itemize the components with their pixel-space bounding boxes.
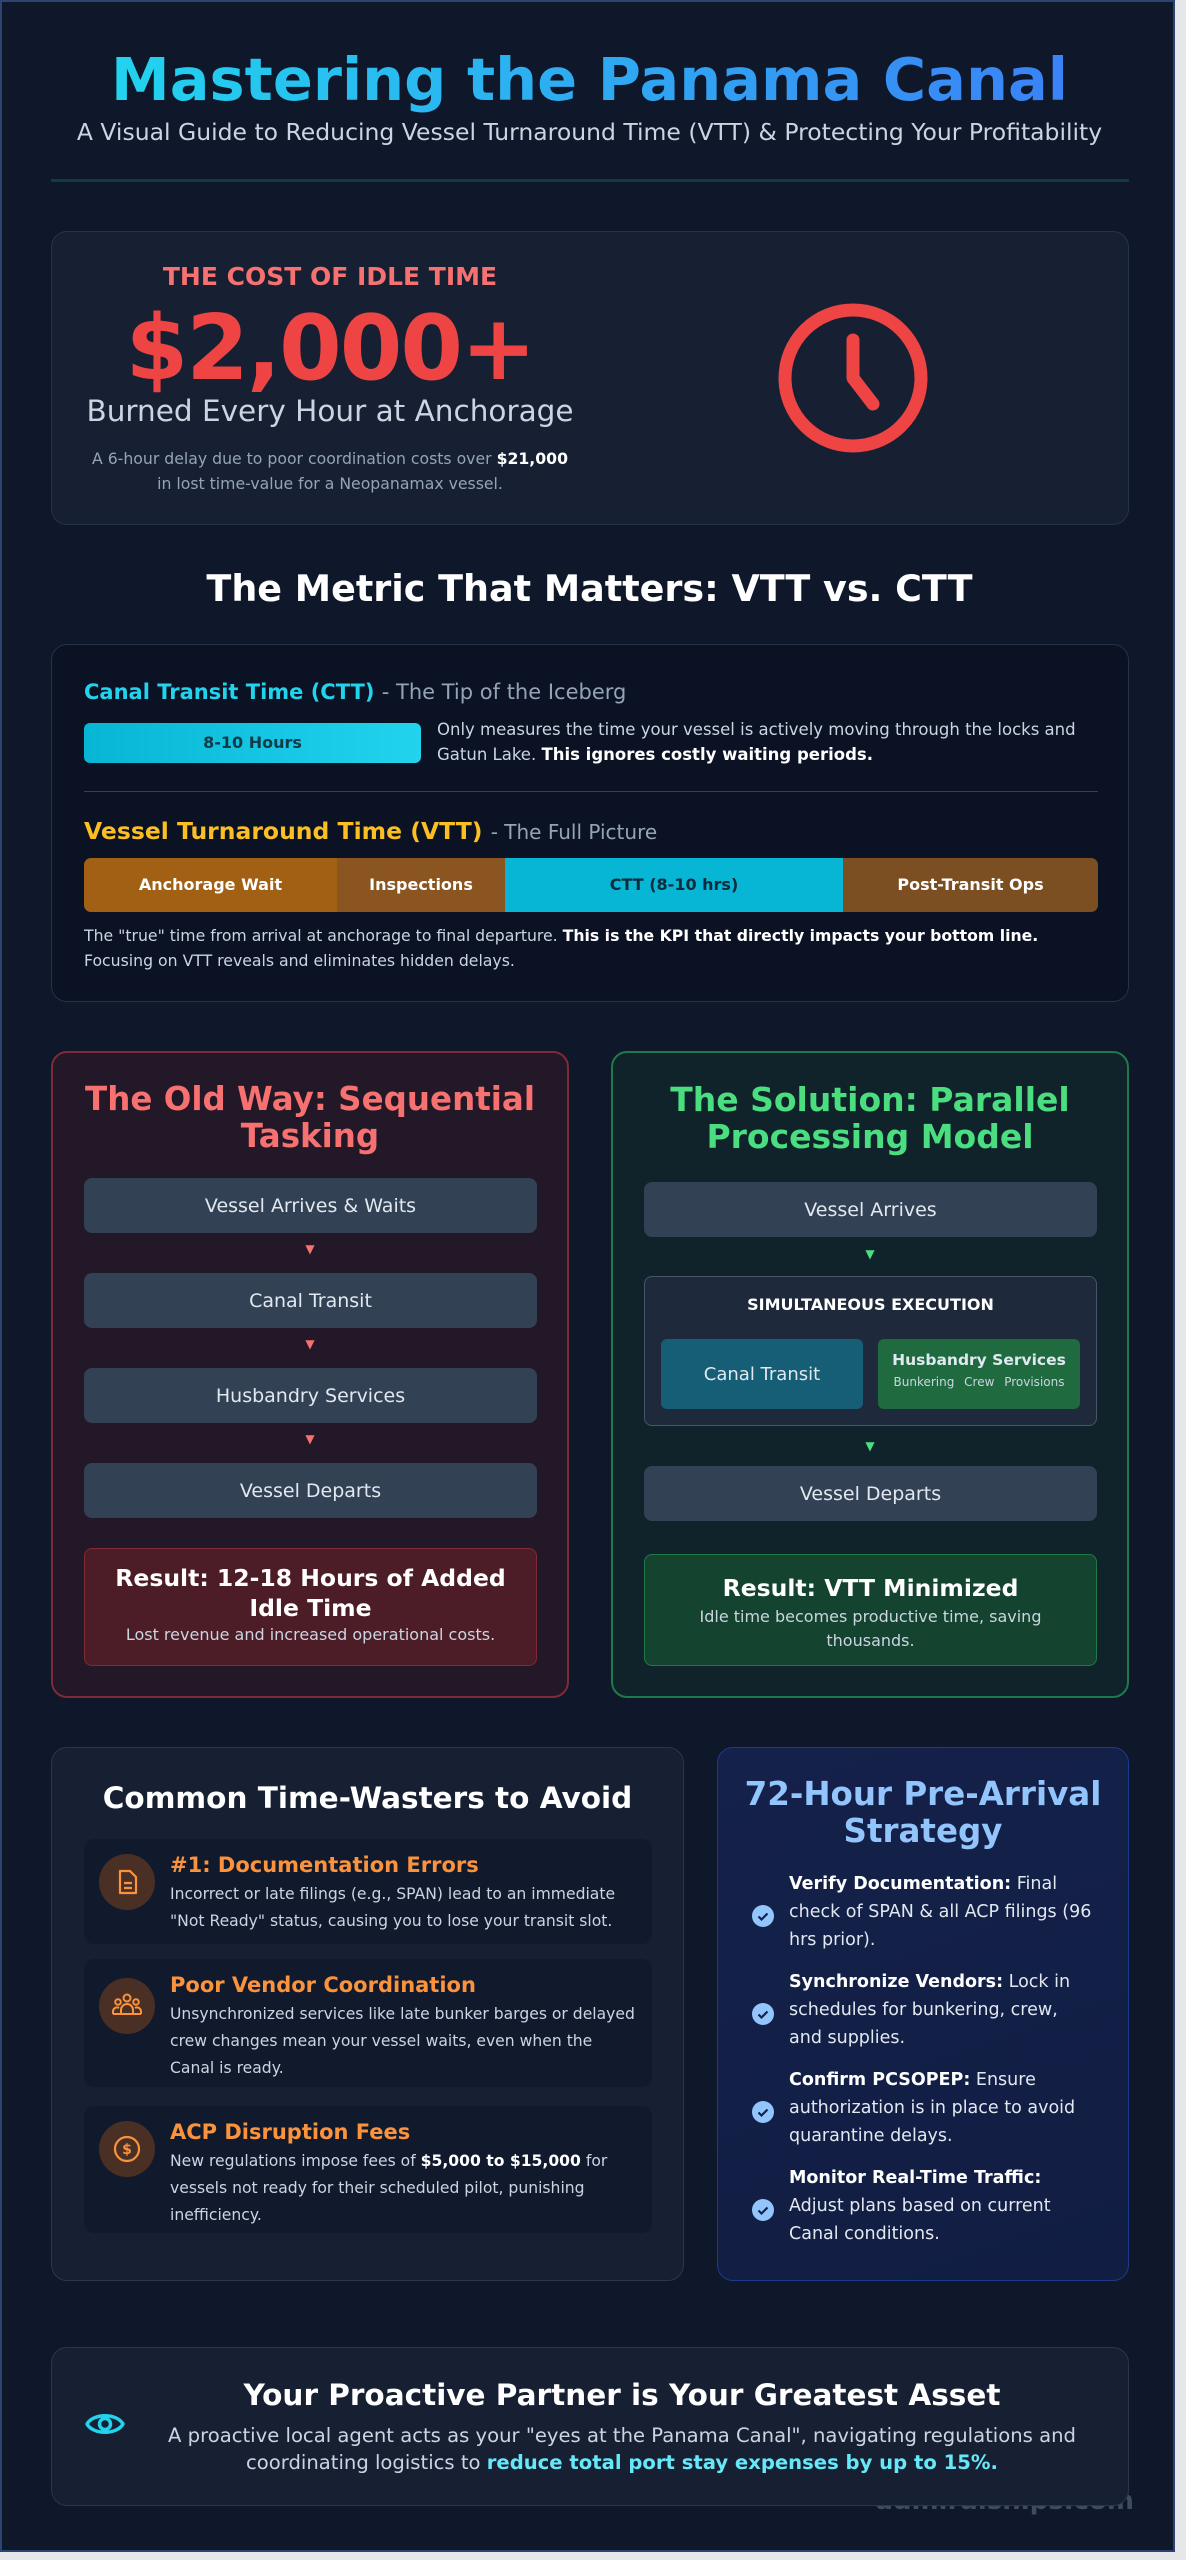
step: [84, 1178, 537, 1233]
check item: Confirm PCSOPEP: Ensure authorization is in place to avoid quarantine delays.: [789, 2070, 1075, 2146]
strategy title: [745, 1775, 1101, 1850]
canal transit: Canal Transit: [704, 1364, 820, 1384]
watermark: admiralships.com: [875, 2486, 1134, 2516]
result box: Idle time becomes productive time, saving: [700, 1607, 1041, 1626]
panel: metric: [51, 644, 1129, 1002]
footer text: [168, 2424, 1076, 2474]
CTT heading: Canal Transit Time (CTT) - The Tip of the Iceberg: [84, 680, 626, 704]
panel: footer partner: [51, 2347, 1129, 2506]
step: [84, 1273, 537, 1328]
old way title: [85, 1080, 535, 1155]
step: [84, 1463, 537, 1518]
husbandry: Bunkering Crew Provisions: [894, 1375, 1064, 1389]
CTT description: Only measures the time your vessel is actively moving through the locks and Gatun Lake. This ignores costly waiting periods.: [437, 720, 1076, 764]
VTT bar: Anchorage Wait: [139, 875, 282, 894]
step: Husbandry Services: [216, 1384, 405, 1406]
item: documentation errors: Incorrect or late filings (e.g., SPAN) lead to an immediate "Not Ready" status, causing you to lose your transit slot.: [170, 1885, 615, 1930]
simultaneous box: [644, 1276, 1097, 1426]
result box: Result: 12-18 Hours of Added: [115, 1564, 506, 1592]
time-wasters title: Common Time-Wasters to Avoid: [103, 1781, 632, 1815]
panel: 72-hour strategy: [717, 1747, 1129, 2281]
footer text: A proactive local agent acts as your "eyes at the Panama Canal", navigating regulations and: [168, 2424, 1076, 2447]
solution title: Processing Model: [706, 1117, 1034, 1156]
VTT description: Focusing on VTT reveals and eliminates hidden delays.: [84, 951, 515, 970]
item: vendor coordination: Poor Vendor Coordination: [170, 1973, 476, 1997]
item: documentation errors: #1: Documentation Errors: [170, 1853, 479, 1877]
cost note: in lost time-value for a Neopanamax vessel.: [157, 474, 503, 493]
check item: Verify Documentation: Final check of SPAN & all ACP filings (96 hrs prior).: [789, 1874, 1091, 1950]
subtitle: A Visual Guide to Reducing Vessel Turnaround Time (VTT) & Protecting Your Profitability: [77, 118, 1102, 146]
cost note: [92, 449, 568, 493]
big number: $2,000+: [126, 296, 534, 401]
step: Vessel Departs: [240, 1480, 381, 1502]
husbandry: Husbandry Services: [892, 1351, 1066, 1369]
heading: metric: The Metric That Matters: VTT vs. CTT: [206, 567, 973, 610]
cost note: A 6-hour delay due to poor coordination costs over $21,000: [92, 449, 568, 468]
simultaneous box: SIMULTANEOUS EXECUTION: [747, 1295, 994, 1314]
arrow: ▼: [305, 1242, 315, 1256]
icon: dollar: $: [122, 2142, 132, 2158]
VTT bar: [84, 858, 1098, 912]
husbandry: [878, 1339, 1080, 1409]
panel: cost of idle time: [51, 231, 1129, 525]
VTT bar: Post-Transit Ops: [897, 875, 1044, 894]
arrow: ▼: [305, 1432, 315, 1446]
item: vendor coordination: crew changes mean your vessel waits, even when the: [170, 2032, 592, 2050]
VTT bar: Inspections: [369, 875, 473, 894]
item: vendor coordination: [84, 1959, 652, 2087]
panel: solution: [611, 1051, 1129, 1698]
old way title: Tasking: [241, 1117, 379, 1155]
item: ACP fees: [84, 2106, 652, 2233]
result box: [84, 1548, 537, 1666]
item: ACP fees: New regulations impose fees of $5,000 to $15,000 for vessels not ready for their scheduled pilot, punishing inefficiency.: [170, 2152, 607, 2224]
step: Vessel Arrives & Waits: [205, 1194, 416, 1216]
result box: thousands.: [826, 1631, 915, 1650]
item: vendor coordination: Canal is ready.: [170, 2059, 284, 2077]
solution title: The Solution: Parallel: [670, 1080, 1070, 1119]
step: Vessel Departs: [800, 1482, 941, 1504]
step: Vessel Arrives: [804, 1198, 937, 1220]
footer text: coordinating logistics to reduce total port stay expenses by up to 15%.: [246, 2451, 998, 2474]
result box: [644, 1554, 1097, 1666]
icon: dollar: [99, 2121, 155, 2177]
panel: old way: [51, 1051, 569, 1698]
old way title: The Old Way: Sequential: [85, 1080, 535, 1118]
check item: Monitor Real-Time Traffic: Adjust plans based on current Canal conditions.: [789, 2168, 1051, 2244]
footer title: Your Proactive Partner is Your Greatest Asset: [244, 2378, 1000, 2412]
step: [644, 1182, 1097, 1237]
icon: people: [99, 1978, 155, 2034]
strategy title: Strategy: [844, 1812, 1002, 1850]
VTT description: [84, 926, 1038, 970]
step: Canal Transit: [249, 1290, 372, 1312]
icon: document: [99, 1854, 155, 1910]
step: [84, 1368, 537, 1423]
cost subtitle: Burned Every Hour at Anchorage: [86, 394, 574, 428]
strategy title: 72-Hour Pre-Arrival: [745, 1775, 1101, 1813]
cost heading: THE COST OF IDLE TIME: [163, 262, 497, 291]
arrow: ▼: [865, 1247, 875, 1261]
panel: time-wasters: [51, 1747, 684, 2281]
CTT bar: 8-10 Hours: [203, 733, 302, 752]
arrow: ▼: [865, 1439, 875, 1453]
canal transit: [661, 1339, 863, 1409]
icon: clock: [778, 304, 928, 452]
result box: Idle Time: [249, 1594, 372, 1622]
item: documentation errors: [84, 1839, 652, 1944]
VTT description: The "true" time from arrival at anchorage to final departure. This is the KPI that directly impacts your bottom line.: [84, 926, 1038, 945]
result box: Lost revenue and increased operational costs.: [126, 1625, 495, 1644]
step: [644, 1466, 1097, 1521]
item: vendor coordination: Unsynchronized services like late bunker barges or delayed: [170, 2005, 635, 2023]
checklist: [752, 1874, 1091, 2244]
CTT bar: [84, 723, 421, 763]
title: Mastering the Panama Canal: [111, 45, 1068, 114]
icon: eye: [85, 2414, 125, 2434]
item: ACP fees: ACP Disruption Fees: [170, 2120, 410, 2144]
VTT heading: Vessel Turnaround Time (VTT) - The Full Picture: [84, 817, 657, 845]
result box: Result: VTT Minimized: [723, 1574, 1018, 1602]
check item: Synchronize Vendors: Lock in schedules for bunkering, crew, and supplies.: [789, 1972, 1070, 2048]
arrow: ▼: [305, 1337, 315, 1351]
VTT bar: CTT (8-10 hrs): [610, 875, 738, 894]
solution title: [670, 1080, 1070, 1156]
